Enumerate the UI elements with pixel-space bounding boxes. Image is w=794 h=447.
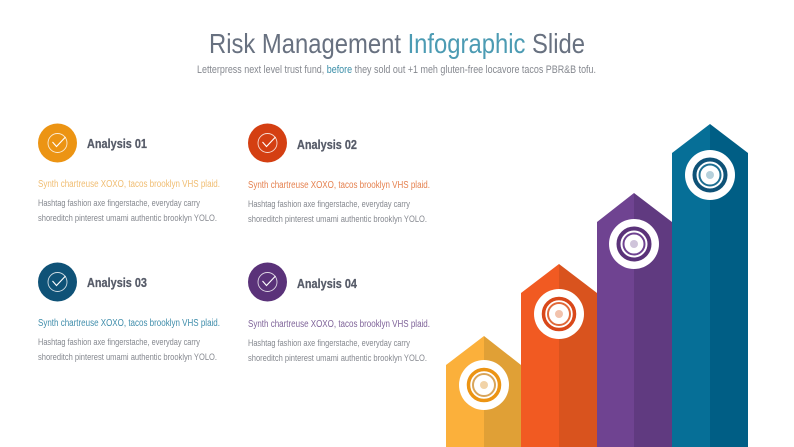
icon: analysis 01 check [38, 124, 77, 162]
body: analysis 01 [38, 198, 217, 223]
body: analysis 04: shoreditch pinterest umami authentic brooklyn YOLO. [248, 353, 427, 363]
body: analysis 03: shoreditch pinterest umami authentic brooklyn YOLO. [38, 352, 217, 362]
subtitle: Letterpress next level trust fund, before they sold out +1 meh gluten-free locavore tacos PBR&B tofu. [197, 64, 596, 76]
panel: analysis 01 [38, 124, 220, 223]
heading: analysis 02: Analysis 02 [297, 137, 357, 152]
heading: analysis 01: Analysis 01 [87, 136, 147, 151]
heading: analysis 04: Analysis 04 [297, 276, 358, 291]
body: analysis 01: Hashtag fashion axe fingerstache, everyday carry [38, 198, 200, 208]
body: analysis 03 [38, 337, 217, 362]
arrow: orange [521, 264, 597, 447]
icon: analysis 04 check [248, 262, 287, 302]
body: analysis 03: Hashtag fashion axe fingerstache, everyday carry [38, 337, 200, 347]
arrow: yellow [446, 336, 521, 447]
title: Risk Management Infographic Slide [209, 28, 585, 59]
body: analysis 02: Hashtag fashion axe fingerstache, everyday carry [248, 199, 410, 209]
body: analysis 02: shoreditch pinterest umami authentic brooklyn YOLO. [248, 214, 427, 224]
arrow: purple [597, 193, 672, 447]
icon: analysis 02 check [248, 124, 287, 162]
arrow: blue [672, 124, 748, 447]
body: analysis 04 [248, 338, 427, 363]
body: analysis 04: Hashtag fashion axe fingerstache, everyday carry [248, 338, 410, 348]
tagline: analysis 01: Synth chartreuse XOXO, tacos brooklyn VHS plaid. [38, 179, 220, 190]
tagline: analysis 04: Synth chartreuse XOXO, tacos brooklyn VHS plaid. [248, 319, 430, 330]
body: analysis 02 [248, 199, 427, 224]
tagline: analysis 02: Synth chartreuse XOXO, tacos brooklyn VHS plaid. [248, 180, 430, 191]
chart: rising arrows [446, 124, 748, 447]
panel: analysis 02 [248, 124, 430, 224]
panel: analysis 03 [38, 262, 220, 362]
heading: analysis 03: Analysis 03 [87, 275, 147, 290]
icon: analysis 03 check [38, 262, 77, 302]
body: analysis 01: shoreditch pinterest umami authentic brooklyn YOLO. [38, 213, 217, 223]
tagline: analysis 03: Synth chartreuse XOXO, tacos brooklyn VHS plaid. [38, 318, 220, 329]
panel: analysis 04 [248, 262, 430, 363]
